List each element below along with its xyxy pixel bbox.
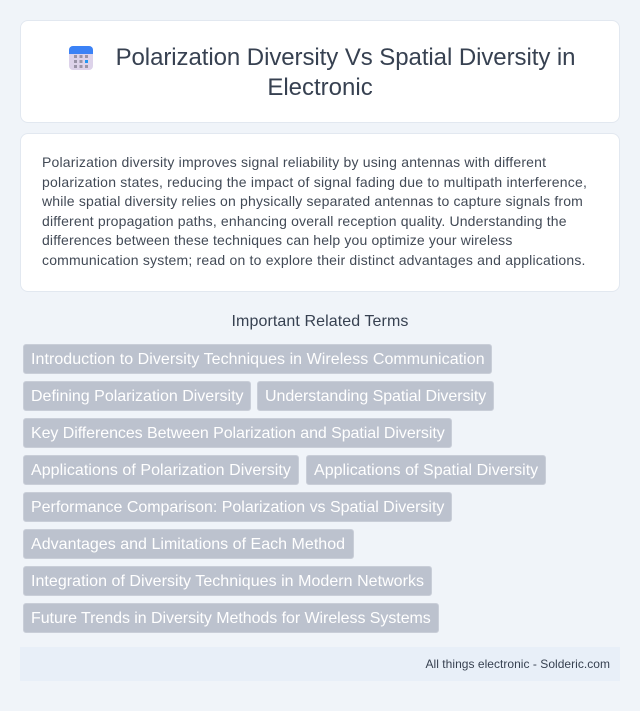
tag: future trends: Future Trends in Diversity Methods for Wireless Systems xyxy=(31,610,431,627)
tag: defining polarization: Defining Polarization Diversity xyxy=(31,388,244,405)
intro paragraph: polarization states, reducing the impact of signal fading due to multipath interference, xyxy=(42,174,587,190)
tag: understanding spatial: Understanding Spatial Diversity xyxy=(265,388,486,405)
panel: intro text card xyxy=(20,133,620,292)
tag: understanding spatial xyxy=(257,381,494,411)
tag: applications spatial: Applications of Spatial Diversity xyxy=(314,462,538,479)
tag: key differences xyxy=(23,418,452,448)
icon: calendar grid xyxy=(69,46,93,70)
tag: applications polarization: Applications of Polarization Diversity xyxy=(31,462,291,479)
tag: applications polarization xyxy=(23,455,299,485)
tag: key differences: Key Differences Between Polarization and Spatial Diversity xyxy=(31,425,445,442)
tag: advantages: Advantages and Limitations of Each Method xyxy=(31,536,345,553)
intro paragraph xyxy=(42,154,587,268)
title xyxy=(116,44,575,101)
tag: applications spatial xyxy=(306,455,546,485)
title: Polarization Diversity Vs Spatial Diversity in xyxy=(116,44,575,71)
tag: performance comparison: Performance Comparison: Polarization vs Spatial Diversity xyxy=(31,499,444,516)
panel: header card xyxy=(20,20,620,123)
footer text: All things electronic - Solderic.com xyxy=(426,657,610,671)
tag: future trends xyxy=(23,603,439,633)
tag: introduction: Introduction to Diversity Techniques in Wireless Communication xyxy=(31,351,485,368)
footer bar xyxy=(20,647,620,681)
title: Electronic xyxy=(267,74,373,101)
intro paragraph: while spatial diversity relies on physically separated antennas to capture signals from xyxy=(42,193,583,209)
intro paragraph: different propagation paths, enhancing overall reception quality. Understanding the xyxy=(42,212,567,228)
heading: important related terms: Important Related Terms xyxy=(232,313,408,330)
tag: performance comparison xyxy=(23,492,452,522)
tag: integration: Integration of Diversity Techniques in Modern Networks xyxy=(31,573,424,590)
intro paragraph: differences between these techniques can help you optimize your wireless xyxy=(42,232,512,248)
tag: integration xyxy=(23,566,432,596)
tag: introduction xyxy=(23,344,492,374)
tag: advantages xyxy=(23,529,354,559)
intro paragraph: communication system; read on to explore their distinct advantages and applications. xyxy=(42,252,586,268)
tag: defining polarization xyxy=(23,381,251,411)
intro paragraph: Polarization diversity improves signal reliability by using antennas with different xyxy=(42,154,546,170)
